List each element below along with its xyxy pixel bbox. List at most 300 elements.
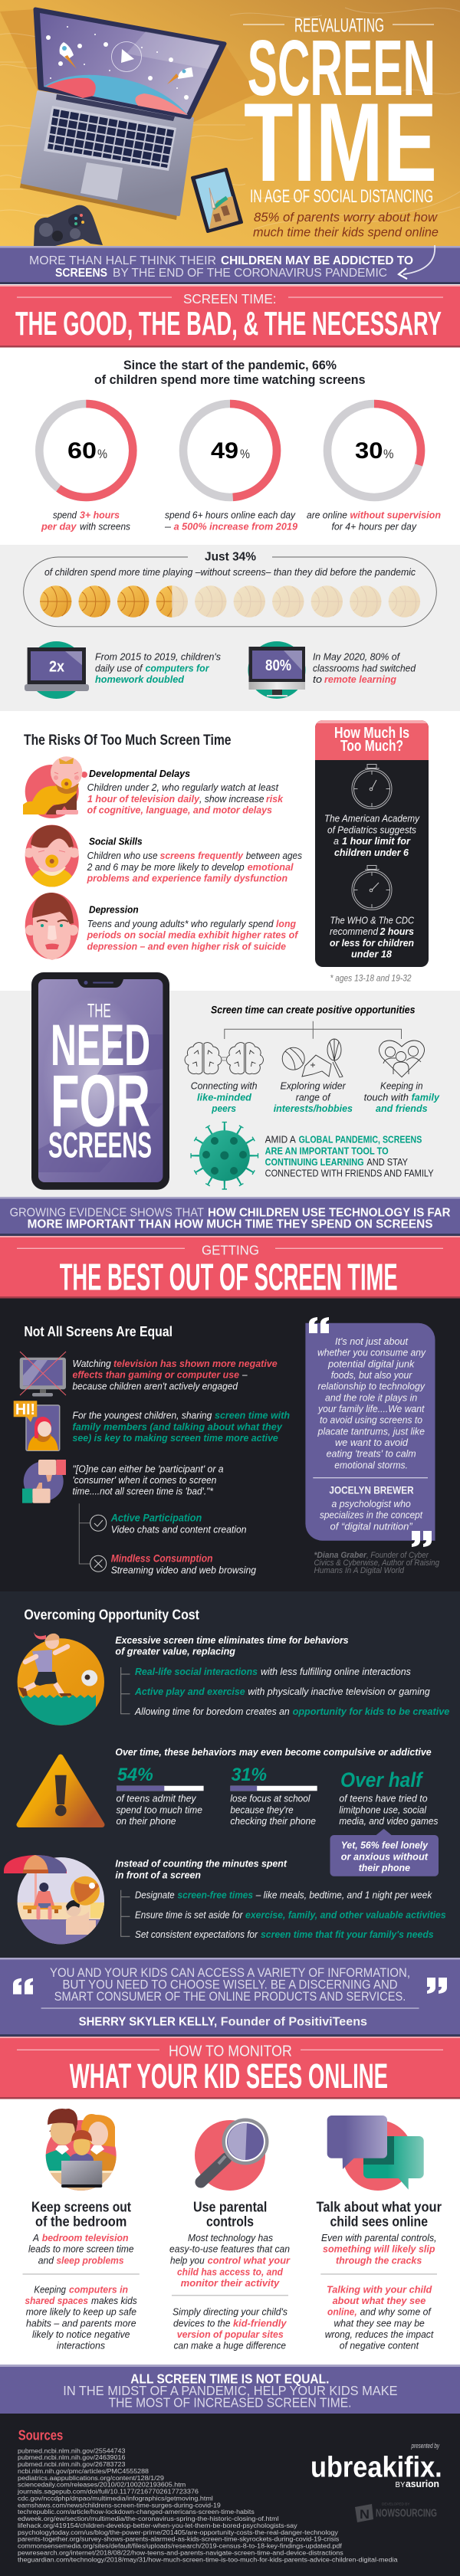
text: WHO and CDC: under 18: [351, 949, 393, 960]
list: screen free tips: exercise, family, and other valuable activities: [245, 1909, 446, 1920]
banner: Sherry Skyler Kelly quote: BUT YOU NEED TO CHOOSE WISELY. BE A DISCERNING AND: [63, 1977, 398, 1991]
panel: overcoming opportunity cost: [0, 1591, 460, 1958]
icon: phone with title: THE: [87, 1000, 111, 1021]
stat 54%: spend too much time: [117, 1804, 202, 1815]
list: screen free tips: screen time that fit your family's needs: [261, 1929, 434, 1940]
column: use parental controls: Simply directing your child's: [172, 2306, 288, 2318]
list: screen free tips: screen-free times: [178, 1889, 253, 1900]
text: television: Watching: [72, 1358, 111, 1369]
text: connecting peers: like-minded: [197, 1091, 252, 1103]
panel: Jocelyn Brewer quote: a psychologist who: [331, 1498, 411, 1509]
icon: phone: [192, 169, 242, 231]
text: television: effects than gaming or computer use: [72, 1369, 239, 1381]
list: sources: pediatrics.aappublications.org/content/128/1/29: [18, 2475, 165, 2482]
panel: need for screens: [0, 972, 460, 1197]
column: use parental controls: can make a huge difference: [174, 2340, 286, 2352]
title block: much time their kids spend online: [253, 225, 439, 239]
logo: ubreakifix by asurion: presented by: [411, 2442, 440, 2450]
caption 30%: for 4+ hours per day: [331, 521, 417, 533]
column: talk about what your child sees: through the cracks: [336, 2255, 422, 2266]
text: participant or consumer: time....not all screen time is 'bad'."*: [72, 1486, 214, 1497]
stat 54%: 54%: [117, 1765, 153, 1785]
list: screen free tips: Designate: [135, 1889, 175, 1900]
stat 54%: [117, 1765, 204, 1827]
icon: desktop 80%: [248, 641, 305, 699]
text: remote learning: classrooms had switched: [313, 663, 416, 674]
text: social skills: screens frequently: [160, 850, 244, 861]
panel: Jocelyn Brewer quote: potential digital junk: [327, 1358, 416, 1369]
text: television: because children aren't actively engaged: [72, 1380, 238, 1391]
text: global pandemic: CONTINUING LEARNING: [265, 1156, 364, 1168]
list: what screens replace: with less fulfilling online interactions: [261, 1666, 411, 1677]
item: active participation: Active Participation: [110, 1512, 202, 1524]
icon: thumbs up and down: [22, 1460, 66, 1503]
stat over half: Over half: [340, 1768, 424, 1791]
item: mindless consumption: Mindless Consumption: [111, 1553, 213, 1565]
column: use parental controls: child has access to, and: [177, 2266, 284, 2277]
rounded callout: just 34% playing: Just 34%: [205, 551, 256, 564]
list: sources: sciencedaily.com/releases/2010/02/100202193605.htm: [18, 2482, 186, 2489]
text: WHO and CDC: or less for children: [330, 937, 414, 949]
panel: how much is too much: How Much Is: [334, 725, 409, 742]
text: global pandemic: CONNECTED WITH FRIENDS AND FAMILY: [265, 1168, 434, 1179]
column: keep screens out: makes kids: [91, 2295, 137, 2306]
panel: Jocelyn Brewer quote: [305, 1317, 435, 1547]
list: sources: [17, 2447, 398, 2563]
banner: all screen time is not equal: THE MOST OF INCREASED SCREEN TIME.: [109, 2394, 351, 2410]
column: talk about what your child sees: what they see may be: [334, 2317, 425, 2329]
stat 54%: of teens admit they: [117, 1793, 197, 1804]
list: screen free tips: Ensure time is set aside for: [135, 1909, 243, 1920]
icon: family with laptop: [45, 2109, 117, 2194]
column: use parental controls: kid-friendly: [233, 2317, 287, 2329]
column: use parental controls: controls: [206, 2214, 254, 2229]
text: exploring interests: interests/hobbies: [274, 1103, 353, 1114]
text: exploring interests: Exploring wider: [281, 1080, 346, 1092]
donut chart 49%: %: [240, 447, 250, 461]
column: keep screens out: habits – and parents more: [26, 2317, 136, 2329]
banner: all screen time is not equal: [0, 2365, 460, 2414]
text: television: –: [242, 1369, 248, 1381]
list: sources: commonsensemedia.org/sites/default/files/uploads/research/2019-census-8-to-18-key-findings-updated.pdf: [18, 2542, 343, 2550]
icon: tablet with HI bubble: HI!: [15, 1401, 35, 1418]
column: keep screens out: Keeping: [34, 2283, 67, 2295]
text: connecting peers: peers: [211, 1103, 236, 1114]
column: keep screens out: interactions: [57, 2340, 105, 2352]
icon: stopwatch one hour: [352, 765, 392, 809]
banner: growing evidence: GROWING EVIDENCE SHOWS THAT: [10, 1206, 204, 1219]
icon: brains: [185, 1043, 263, 1074]
column: keep screens out: [23, 2200, 140, 2352]
icon: family heart: [379, 1041, 425, 1077]
list: sources: ncbi.nlm.nih.gov/pmc/articles/PMC4555288: [18, 2468, 150, 2475]
text: participant or consumer: 'consumer' when it comes to screen: [72, 1474, 216, 1486]
stat 31%: [230, 1765, 317, 1827]
text: excessive screen time: [115, 1634, 349, 1657]
panel: Jocelyn Brewer quote: relationship to technology: [317, 1381, 426, 1392]
text: youngest children: screen time with: [215, 1410, 290, 1421]
column: talk about what your child sees: about what they see: [333, 2295, 426, 2306]
caption 49%: a 500% increase from 2019: [174, 521, 298, 533]
text: social skills: Social Skills: [89, 836, 143, 847]
panel: Jocelyn Brewer quote: of “digital nutrition”: [330, 1520, 412, 1532]
section header: how to monitor: [0, 2037, 460, 2099]
text: developmental delays: 1 hour of television daily: [87, 793, 200, 805]
text: instead of counting: Instead of counting the minutes spent: [115, 1858, 288, 1870]
column: keep screens out: Keep screens out: [31, 2200, 131, 2215]
section: pandemic stats: [0, 348, 460, 545]
text: depression: Depression: [89, 904, 139, 916]
banner: all screen time is not equal: IN THE MIDST OF A PANDEMIC, HELP YOUR KIDS MAKE: [63, 2383, 398, 2398]
text: connecting peers: [191, 1080, 258, 1114]
panel: Jocelyn Brewer quote: eating 'treats' to calm: [327, 1448, 416, 1460]
panel: risks: [23, 720, 429, 983]
caption 60%: per day: [41, 521, 77, 533]
stat 54%: on their phone: [117, 1815, 176, 1827]
text: developmental delays: , show increase: [199, 793, 264, 805]
heading: Not All Screens Are Equal: [24, 1323, 172, 1339]
column: use parental controls: Most technology has: [188, 2232, 273, 2243]
icon: soccer player: [15, 1632, 104, 1732]
stat 31%: because they're: [230, 1804, 294, 1815]
text: remote learning: remote learning: [324, 673, 396, 685]
column: keep screens out: A: [32, 2232, 39, 2243]
logo: nowsourcing: [355, 2502, 437, 2522]
text: attribution Diana Graber: [314, 1551, 440, 1575]
column: talk about what your child sees: Even with parental controls,: [321, 2232, 437, 2243]
text: television: television has shown more negative: [113, 1358, 278, 1369]
column: talk about what your child sees: Talking with your child: [327, 2283, 432, 2295]
banner: Sherry Skyler Kelly quote: SMART CONSUMER OF THE ONLINE PRODUCTS AND SERVICES.: [54, 1989, 406, 2004]
list: what screens replace: Active play and exercise: [134, 1686, 245, 1697]
icon: teen face: [25, 893, 79, 960]
column: use parental controls: monitor their activity: [181, 2277, 280, 2289]
column: use parental controls: help you: [170, 2255, 205, 2266]
text: family and friends: Keeping in: [380, 1080, 423, 1092]
stat 31%: checking their phone: [230, 1815, 316, 1827]
icon: stopwatch two hours: [352, 866, 392, 910]
icon: tablet with HI bubble: [14, 1401, 60, 1450]
list: what screens replace: Real-life social interactions: [135, 1666, 258, 1677]
panel: Jocelyn Brewer quote: to avoid using screens to: [320, 1414, 422, 1426]
list: screen free tips: [135, 1889, 446, 1940]
logo: ubreakifix by asurion: asurion: [406, 2479, 439, 2489]
title block: [243, 15, 439, 239]
caption 60%: spend: [53, 510, 77, 521]
caption 60%: with screens: [80, 521, 130, 533]
text: depression: [87, 904, 299, 952]
text: exploring interests: range of: [296, 1091, 331, 1103]
text: social skills: [87, 836, 302, 884]
column: use parental controls: [169, 2200, 291, 2352]
hero panel: [0, 0, 460, 246]
caption 49%: spend 6+ hours online each day: [165, 510, 296, 521]
icon: beach scene: [4, 1855, 107, 1946]
text: youngest children: see) is key to making screen time more active: [72, 1432, 278, 1444]
banner: addicted to screens: SCREENS: [55, 267, 107, 280]
section header: how to monitor: HOW TO MONITOR: [169, 2043, 292, 2060]
footnote: ages: * ages 13-18 and 19-32: [330, 975, 412, 984]
callout: 56% lonely: Yet, 56% feel lonely: [341, 1840, 429, 1851]
text: computers for homework: homework doubled: [95, 673, 185, 685]
icon: speech bubbles: [327, 2116, 424, 2191]
banner: growing evidence: MORE IMPORTANT THAN HOW MUCH TIME THEY SPEND ON SCREENS: [28, 1218, 433, 1231]
stat 31%: lose focus at school: [230, 1793, 311, 1804]
donut chart 30%: [327, 404, 421, 497]
panel: Jocelyn Brewer quote: JOCELYN BREWER: [329, 1483, 414, 1496]
banner: Sherry Skyler Kelly quote: SHERRY SKYLER KELLY,: [79, 2015, 217, 2028]
caption 60%: 3+ hours: [80, 510, 120, 521]
section header: best out of screen time: GETTING: [202, 1243, 259, 1258]
text: excessive screen time: Excessive screen time eliminates time for behaviors: [115, 1634, 349, 1646]
column: keep screens out: of the bedroom: [35, 2214, 127, 2229]
icon: phone with title: [31, 972, 169, 1190]
text: depression: periods on social media exhibit higher rates of: [87, 929, 299, 941]
text: global pandemic: ARE AN IMPORTANT TOOL TO: [265, 1145, 389, 1156]
donut chart 49%: [183, 404, 277, 497]
panel: Jocelyn Brewer quote: we want to avoid: [335, 1437, 409, 1448]
text: computers for homework: From 2015 to 2019, children's: [95, 651, 221, 663]
banner: growing evidence: [0, 1197, 460, 1236]
column: use parental controls: easy-to-use features that can: [169, 2243, 290, 2255]
donut chart 60%: %: [97, 447, 107, 461]
list: sources: pubmed.ncbi.nlm.nih.gov/24639016: [18, 2454, 126, 2461]
column: keep screens out: shared spaces: [25, 2295, 88, 2306]
text: family and friends: and friends: [376, 1103, 428, 1114]
text: developmental delays: Developmental Delays: [89, 768, 190, 779]
icon: open quote: [309, 1317, 329, 1333]
icon: close quote: [427, 1978, 447, 1994]
list: sources: parents-together.org/survey-shows-parents-alarmed-as-kids-screen-time-skyrockets-during-covid-19-crisis: [18, 2536, 339, 2543]
text: depression: Teens and young adults* who regularly spend: [87, 918, 274, 929]
text: excessive screen time: of greater value, replacing: [115, 1646, 235, 1657]
text: developmental delays: Children under 2, who regularly watch at least: [87, 782, 279, 793]
item: mindless consumption: [90, 1553, 257, 1575]
rounded callout: just 34% playing: of children spend more time playing –without screens– than they did before the pandemic: [44, 566, 416, 578]
title block: REEVALUATING: [294, 15, 384, 37]
donut chart 30%: %: [383, 447, 394, 461]
text: compulsive: Over time, these behaviors may even become compulsive or addictive: [115, 1746, 432, 1758]
text: social skills: Children who use: [87, 850, 158, 861]
text: WHO and CDC: [330, 915, 415, 960]
banner: addicted to screens: CHILDREN MAY BE ADDICTED TO: [221, 254, 413, 267]
stat over half: of teens have tried to: [339, 1793, 428, 1804]
text: television: [72, 1358, 278, 1391]
text: AAP: 1 hour limit for: [342, 835, 411, 847]
text: family and friends: [364, 1080, 440, 1114]
icon: open quote: [13, 1978, 33, 1994]
text: AAP: a: [334, 835, 339, 847]
icon: game controller: [34, 205, 103, 246]
icon: child face: [25, 824, 80, 887]
icon: desktop 80%: 80%: [265, 657, 291, 674]
icon: laptop: [20, 9, 225, 220]
icon: virus: [190, 1122, 258, 1190]
column: keep screens out: computers in: [69, 2283, 128, 2295]
caption 49%: [164, 510, 298, 533]
text: AAP: children under 6: [334, 847, 409, 858]
banner: Sherry Skyler Kelly quote: Founder of PositiviTeens: [221, 2015, 367, 2028]
heading: sources: Sources: [18, 2427, 63, 2443]
column: talk about what your child sees: of negative content: [340, 2340, 419, 2352]
section header: best out of screen time: [0, 1236, 460, 1298]
list: sources: cdc.gov/nccdphp/dnpao/multimedia/infographics/getmoving.html: [18, 2495, 213, 2502]
panel: sources and logos: [0, 2414, 460, 2576]
donut chart 49%: 49: [211, 438, 238, 464]
title block: 85% of parents worry about how: [254, 210, 439, 224]
item: active participation: [90, 1512, 247, 1535]
text: family and friends: family: [412, 1091, 440, 1103]
text: WHO and CDC: 2 hours: [380, 926, 414, 937]
caption 30%: [307, 510, 441, 533]
panel: Jocelyn Brewer quote: placate tantrums, just like: [317, 1425, 425, 1437]
text: global pandemic: [265, 1134, 434, 1179]
icon: phone with title: SCREENS: [48, 1125, 152, 1165]
column: keep screens out: sleep problems: [57, 2255, 124, 2266]
stat over half: [339, 1768, 439, 1827]
text: global pandemic: GLOBAL PANDEMIC, SCREENS: [299, 1134, 422, 1145]
section header: the good, the bad, the necessary: [0, 285, 460, 348]
icon: magnifier: [195, 2118, 268, 2191]
heading: positive opportunities: Screen time can create positive opportunities: [211, 1004, 416, 1015]
banner: Sherry Skyler Kelly quote: YOU AND YOUR KIDS CAN ACCESS A VARIETY OF INFORMATION,: [50, 1965, 410, 1980]
banner: Sherry Skyler Kelly quote: [0, 1958, 460, 2037]
text: WHO and CDC: The WHO & The CDC: [330, 915, 415, 926]
text: developmental delays: of cognitive, language, and motor delays: [87, 805, 272, 816]
banner: addicted to screens: [0, 245, 460, 285]
text: attribution Diana Graber: *Diana Graber: [314, 1551, 367, 1560]
icon: phone with title: NEED: [51, 1013, 150, 1078]
column: keep screens out: likely to notice negative: [32, 2329, 130, 2340]
text: attribution Diana Graber: Humans In A Digital World: [314, 1566, 405, 1575]
logo: ubreakifix by asurion: BY: [396, 2481, 406, 2489]
list: sources: pewresearch.org/internet/2018/08/22/how-teens-and-parents-navigate-screen-time-and-device-distractions: [18, 2549, 343, 2556]
icon: crossed-out tv: [20, 1352, 66, 1396]
text: WHO and CDC: recommend: [330, 926, 379, 937]
text: instead of counting: in front of a screen: [115, 1869, 201, 1880]
text: social skills: between ages: [246, 850, 302, 861]
panel: just 34% and remote stats: [0, 545, 460, 711]
list: sources: earnshaws.com/news/childrens-screen-time-surges-during-covid-19: [18, 2502, 221, 2509]
stat over half: media, and video games: [339, 1815, 439, 1827]
text: social skills: problems and experience family dysfunction: [87, 873, 288, 884]
banner: addicted to screens: BY THE END OF THE CORONAVIRUS PANDEMIC: [113, 267, 387, 280]
text: developmental delays: [87, 768, 284, 816]
item: active participation: Video chats and content creation: [111, 1523, 247, 1535]
panel: how much is too much: Too Much?: [340, 738, 403, 755]
panel: Jocelyn Brewer quote: It's not just about: [335, 1336, 409, 1347]
text: youngest children: family members (and talking about what they: [72, 1421, 283, 1432]
item: mindless consumption: Streaming video and web browsing: [111, 1564, 257, 1575]
callout: 56% lonely: their phone: [359, 1862, 410, 1873]
banner: growing evidence: HOW CHILDREN USE TECHNOLOGY IS FAR: [208, 1206, 451, 1219]
banner: all screen time is not equal: ALL SCREEN TIME IS NOT EQUAL.: [130, 2371, 329, 2387]
heading: 66% more watching: [94, 359, 365, 387]
column: use parental controls: Use parental: [193, 2200, 267, 2215]
column: use parental controls: control what your: [208, 2255, 291, 2266]
column: keep screens out: and: [38, 2255, 54, 2266]
column: talk about what your child sees: something will likely slip: [323, 2243, 435, 2255]
list: what screens replace: with physically inactive television or gaming: [248, 1686, 430, 1697]
heading: Overcoming Opportunity Cost: [24, 1606, 199, 1622]
list: screen free tips: – like meals, bedtime, and 1 night per week: [255, 1889, 433, 1900]
text: remote learning: In May 2020, 80% of: [313, 651, 400, 663]
column: talk about what your child sees: Talk about what your: [316, 2200, 442, 2215]
panel: how to monitor tips: [23, 2109, 442, 2351]
list: what screens replace: opportunity for kids to be creative: [293, 1706, 449, 1717]
text: AAP: [324, 813, 420, 858]
stat 31%: 31%: [232, 1765, 267, 1785]
icon: warning triangle: [19, 1757, 102, 1825]
list: sources: psychologytoday.com/us/blog/the-power-prime/201405/are-opportunity-costs-the-real-danger-technology: [18, 2529, 338, 2536]
list: sources: lifehack.org/419154/children-develop-better-when-you-let-them-be-bored-psychologists-say: [18, 2522, 297, 2529]
heading: 66% more watching: Since the start of the pandemic, 66%: [123, 359, 337, 372]
caption 30%: without supervision: [350, 510, 441, 521]
text: connecting peers: Connecting with: [191, 1080, 258, 1092]
panel: Jocelyn Brewer quote: foods, but also your: [331, 1369, 412, 1381]
column: keep screens out: leads to more screen time: [28, 2243, 133, 2255]
icon: laptop 2x: 2x: [49, 659, 64, 676]
list: sources: pubmed.ncbi.nlm.nih.gov/26783723: [18, 2461, 126, 2468]
logo: nowsourcing: DEVELOPED BY: [382, 2502, 410, 2506]
text: instead of counting: [115, 1858, 288, 1880]
logo: nowsourcing: N: [360, 2507, 370, 2522]
callout: 56% lonely: [330, 1829, 439, 1876]
rounded callout: just 34% playing: [24, 551, 436, 627]
icon: phone with title: FOR: [51, 1060, 150, 1142]
section header: the good, the bad, the necessary: SCREEN TIME:: [183, 291, 276, 306]
donut chart 30%: 30: [355, 438, 383, 464]
text: remote learning: to: [313, 673, 322, 685]
list: sources: journals.sagepub.com/doi/full/10.1177/2167702617723376: [17, 2489, 199, 2495]
heading: 66% more watching: of children spend more time watching screens: [94, 373, 365, 387]
caption 49%: –: [164, 521, 172, 533]
text: participant or consumer: [72, 1463, 224, 1497]
column: talk about what your child sees: online,: [327, 2306, 357, 2318]
logo: ubreakifix by asurion: [310, 2442, 442, 2489]
panel: Jocelyn Brewer quote: emotional storms.: [334, 1459, 408, 1470]
text: attribution Diana Graber: Civics & Cyberwise, Author of Raising: [314, 1558, 440, 1568]
text: computers for homework: computers for: [146, 663, 209, 674]
text: AAP: of Pediatrics suggests: [327, 824, 416, 836]
text: attribution Diana Graber: , Founder of Cyber: [366, 1551, 429, 1560]
panel: Jocelyn Brewer quote: and the role it plays in: [325, 1391, 417, 1403]
text: exploring interests: [274, 1080, 353, 1114]
text: computers for homework: [95, 651, 221, 685]
list: sources: edweek.org/ew/section/multimedia/the-coronavirus-spring-the-historic-closing-of.html: [18, 2515, 279, 2522]
panel: Jocelyn Brewer quote: your family life....We want: [317, 1403, 426, 1414]
column: keep screens out: bedroom television: [42, 2232, 129, 2243]
text: participant or consumer: "[O]ne can either be 'participant' or a: [72, 1463, 224, 1474]
icon: close quote: [412, 1531, 432, 1547]
panel: Jocelyn Brewer quote: whether you consume any: [317, 1347, 426, 1358]
text: youngest children: For the youngest children, sharing: [72, 1410, 212, 1421]
arrow: curved down to banner: [399, 245, 435, 279]
list: sources: theguardian.com/technology/2018/may/31/how-much-screen-time-is-too-much-for-kids-parents-advice-children-digital-media: [18, 2556, 398, 2563]
text: youngest children: [72, 1410, 290, 1444]
list: screen free tips: Set consistent expectations for: [135, 1929, 258, 1940]
column: use parental controls: devices to the: [173, 2317, 230, 2329]
pictogram: 3.5 of 10 basketballs: [40, 585, 420, 618]
banner: addicted to screens: MORE THAN HALF THINK THEIR: [29, 254, 216, 267]
heading: risks: The Risks Of Too Much Screen Time: [24, 732, 232, 749]
icon: laptop 2x: [25, 641, 89, 699]
text: global pandemic: AND STAY: [366, 1156, 408, 1168]
list: what screens replace: [134, 1666, 449, 1717]
callout: 56% lonely: or anxious without: [341, 1850, 429, 1862]
panel: not all screens are equal: [0, 1298, 460, 1591]
stat over half: limitphone use, social: [339, 1804, 427, 1815]
